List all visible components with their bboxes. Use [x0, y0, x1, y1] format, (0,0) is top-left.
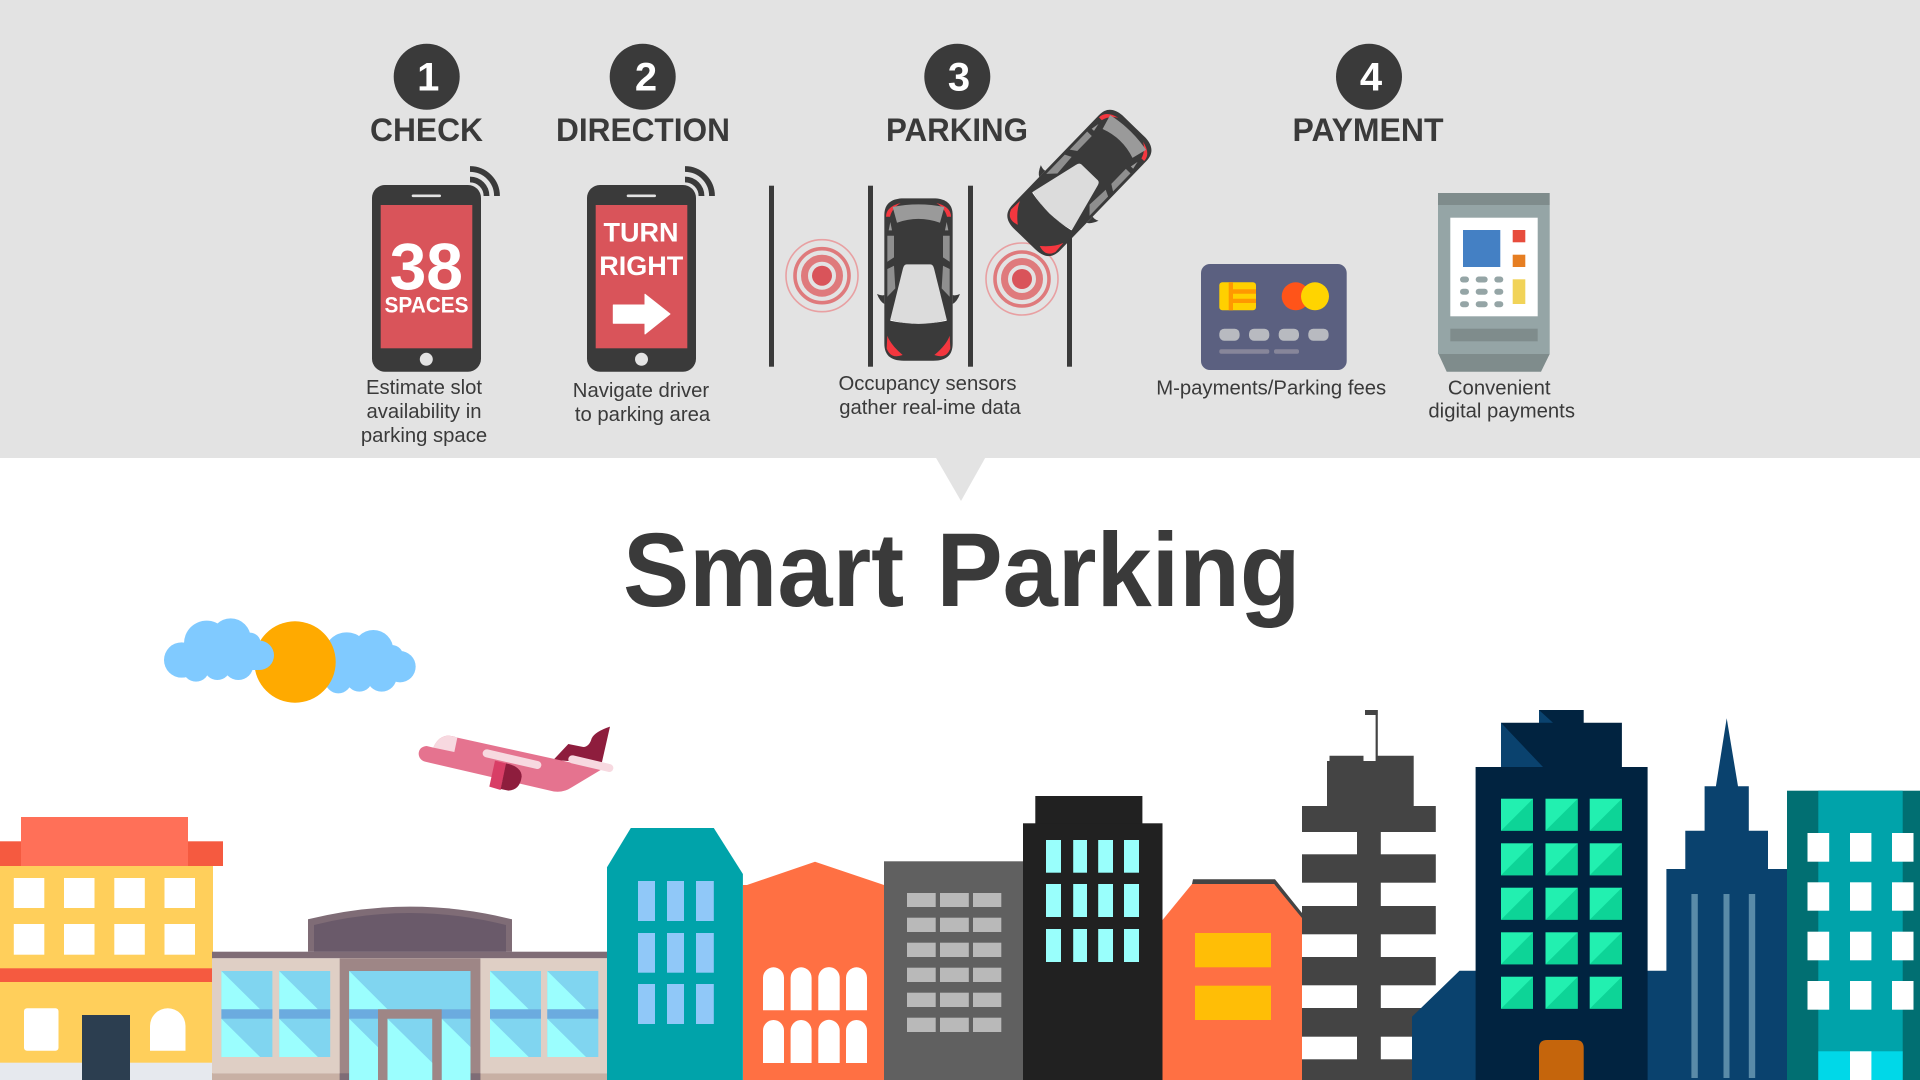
icon: credit card [1201, 264, 1347, 370]
parking bay lines [769, 186, 1072, 367]
icon: phone with spaces count: 38 [390, 229, 463, 303]
caption: direction: to parking area [575, 404, 711, 426]
building: teal office [1787, 791, 1920, 1080]
building: orange gabled [743, 862, 884, 1080]
panel: smart parking steps [0, 0, 1920, 501]
building: black tower [1023, 796, 1162, 1080]
left cloud [164, 618, 274, 682]
caption: direction: Navigate driver [573, 380, 709, 402]
caption: check: parking space [361, 425, 487, 447]
caption: kiosk: digital payments [1428, 401, 1575, 423]
caption: check [361, 377, 487, 447]
caption: m-payments: M-payments/Parking fees [1156, 377, 1386, 399]
number badge 1 [394, 44, 460, 110]
icon: phone with turn right [587, 169, 712, 372]
caption: direction [573, 380, 711, 426]
title: Smart Parking [623, 511, 1300, 629]
building: navy tower [1476, 710, 1648, 1080]
icon: sensor right [986, 243, 1058, 315]
caption: check: Estimate slot [366, 377, 482, 399]
icon: parked car [877, 198, 960, 361]
sun [254, 621, 336, 703]
number badge 2 [610, 44, 676, 110]
number badge 4: 4 [1360, 56, 1383, 100]
building: shopping mall [212, 907, 607, 1080]
icon: phone with spaces count: SPACES [384, 293, 468, 318]
number badge 3 [924, 44, 990, 110]
step 4: payment [1156, 44, 1575, 423]
heading: parking: PARKING [886, 112, 1028, 148]
icon: car entering bay [996, 99, 1163, 267]
caption: parking [838, 373, 1021, 419]
building: dark striped tower [1302, 710, 1436, 1080]
caption: parking: gather real-ime data [839, 397, 1021, 419]
number badge 3: 3 [948, 56, 970, 100]
heading: check: CHECK [370, 112, 483, 148]
right cloud [324, 630, 416, 693]
icon: airplane [419, 727, 610, 792]
building: teal tower [607, 828, 743, 1080]
icon: phone with turn right: TURN [604, 218, 678, 248]
number badge 2: 2 [635, 56, 657, 100]
caption: kiosk [1428, 377, 1575, 423]
building: orange shop [1162, 879, 1302, 1080]
icon: phone with turn right: RIGHT [599, 251, 684, 281]
step 3: parking [769, 44, 1163, 419]
building: yellow hotel [0, 817, 223, 1080]
number badge 1: 1 [417, 56, 439, 100]
heading: payment: PAYMENT [1292, 112, 1444, 148]
step 2: direction [556, 44, 730, 426]
caption: parking: Occupancy sensors [838, 373, 1017, 395]
icon: sensor left [786, 240, 858, 312]
number badge 4 [1336, 44, 1402, 110]
caption: kiosk: Convenient [1448, 377, 1551, 399]
building: grey office [884, 861, 1023, 1080]
building: blue skyscraper [1412, 718, 1787, 1080]
icon: sun and clouds [164, 618, 416, 703]
caption: check: availability in [367, 401, 481, 423]
step 1: check [361, 44, 497, 447]
heading: direction: DIRECTION [556, 112, 730, 148]
pointer triangle [936, 457, 986, 501]
icon: payment kiosk [1438, 193, 1550, 372]
icon: phone with spaces count [372, 169, 497, 372]
